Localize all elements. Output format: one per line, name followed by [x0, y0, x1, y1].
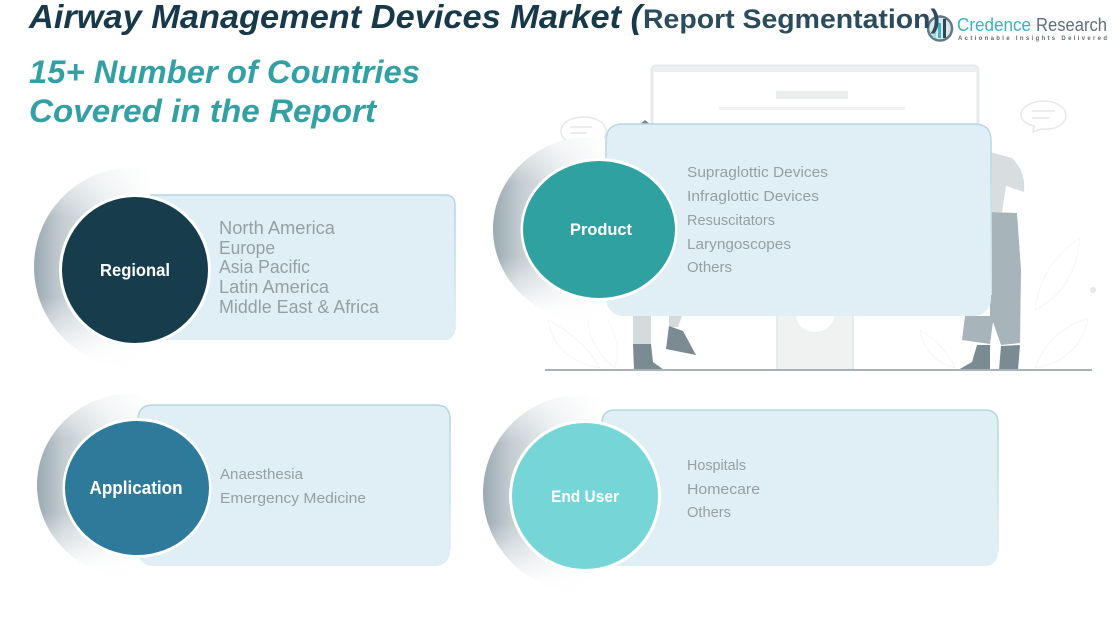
- circle badge: Regional: [100, 260, 170, 280]
- logo: Credence Research: Research: [1036, 15, 1107, 35]
- crescent: [493, 137, 687, 321]
- list: Others: [687, 504, 731, 521]
- crescent: [34, 168, 230, 366]
- list: Europe: [219, 238, 275, 258]
- logo icon: [928, 16, 952, 40]
- card: [145, 195, 455, 340]
- circle badge: Application: [90, 478, 182, 498]
- list: Asia Pacific: [219, 257, 310, 277]
- right person: [958, 152, 1024, 370]
- list: [687, 164, 828, 276]
- speech bubble right: [1021, 101, 1066, 132]
- logo: Credence Research: Credence: [957, 15, 1031, 35]
- list: [687, 457, 760, 521]
- list: [219, 218, 380, 317]
- list: Emergency Medicine: [220, 490, 366, 507]
- monitor: [652, 66, 978, 370]
- list: Latin America: [219, 277, 330, 297]
- list: Others: [687, 259, 732, 276]
- subtitle: 15+ Number of Countries: [29, 54, 420, 90]
- list: Anaesthesia: [220, 466, 304, 483]
- list: North America: [219, 218, 336, 238]
- list: Infraglottic Devices: [687, 188, 819, 205]
- ground line: [545, 369, 1092, 371]
- card: [606, 124, 991, 316]
- crescent: [37, 394, 225, 576]
- list: Hospitals: [687, 457, 746, 474]
- circle badge: [520, 158, 678, 301]
- title: [28, 0, 940, 35]
- panel: product: [493, 124, 991, 321]
- illustration: people with monitor: [545, 66, 1096, 371]
- list: [220, 466, 366, 507]
- card: [138, 405, 450, 566]
- left person legs: [633, 120, 696, 370]
- circle badge: Product: [570, 220, 632, 239]
- speech bubble left: [561, 117, 606, 147]
- list: Resuscitators: [687, 212, 775, 229]
- list: Homecare: [687, 481, 760, 498]
- list: Supraglottic Devices: [687, 164, 828, 181]
- list: Middle East & Africa: [219, 297, 380, 317]
- panel: regional: [34, 168, 455, 366]
- subtitle: [29, 54, 420, 129]
- card: [602, 410, 998, 566]
- panel: application: [37, 394, 450, 576]
- logo: Credence Research: Actionable Insights Delivered: [958, 36, 1107, 42]
- list: Laryngoscopes: [687, 236, 791, 253]
- circle badge: [62, 418, 212, 558]
- circle badge: [59, 194, 211, 346]
- title: Report Segmentation): [643, 4, 940, 34]
- circle badge: End User: [551, 487, 619, 506]
- panel: end user: [483, 395, 998, 591]
- crescent: [483, 395, 679, 591]
- logo: Credence Research: [928, 15, 1107, 42]
- circle badge: [509, 420, 661, 572]
- decorative leaves: [548, 238, 1088, 368]
- subtitle: Covered in the Report: [29, 93, 377, 129]
